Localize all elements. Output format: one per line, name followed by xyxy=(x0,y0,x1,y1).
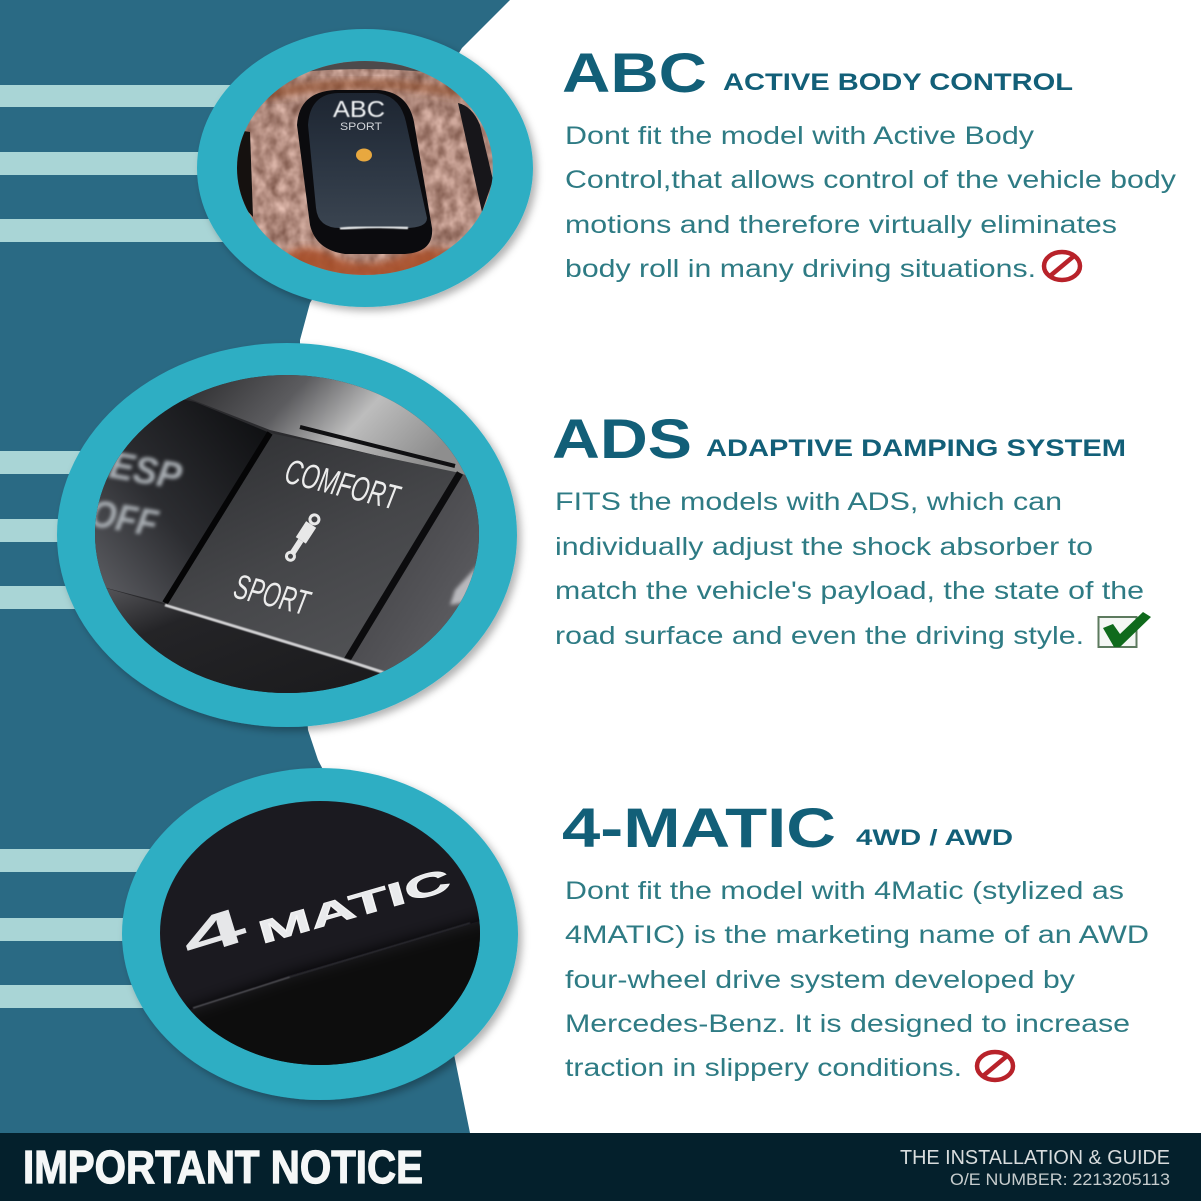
heading: ADS: ADS xyxy=(552,407,692,470)
icon: prohibited xyxy=(1044,252,1080,280)
blurred ESP label: ESP xyxy=(106,445,185,498)
blurred OFF label: OFF xyxy=(86,493,162,546)
stripes: ABC xyxy=(0,85,240,242)
icon: prohibited xyxy=(977,1052,1013,1080)
badge lettering: MATIC xyxy=(254,862,454,951)
footer part number: O/E NUMBER: 2213205113 xyxy=(950,1170,1170,1189)
body text: ABC: Control,that allows control of the vehicle body xyxy=(565,166,1177,194)
subheading: 4WD / AWD: 4WD / AWD xyxy=(856,825,1013,850)
switch label: sport: SPORT xyxy=(230,567,315,624)
orange indicator xyxy=(356,148,372,162)
body text: ADS: road surface and even the driving style. xyxy=(555,622,1084,650)
body text: 4-MATIC: four-wheel drive system developed by xyxy=(565,966,1076,994)
heading: 4-MATIC: 4-MATIC xyxy=(562,796,836,859)
badge numeral: 4 xyxy=(175,896,253,969)
subheading: active body control: ACTIVE BODY CONTROL xyxy=(723,69,1073,96)
switch label: comfort: COMFORT xyxy=(281,452,405,518)
subheading: adaptive damping system: ADAPTIVE DAMPING SYSTEM xyxy=(706,435,1126,462)
footer title: IMPORTANT NOTICE xyxy=(23,1141,423,1193)
body text: 4-MATIC: Dont fit the model with 4Matic (stylized as xyxy=(565,877,1124,905)
circular photo: 4MATIC badge xyxy=(122,768,518,1100)
body text: ABC: body roll in many driving situations. xyxy=(565,255,1036,283)
footer bar xyxy=(0,1133,1201,1201)
teal background shape xyxy=(0,0,510,1133)
button label: ABC xyxy=(333,96,385,122)
section: ADS xyxy=(552,407,1151,650)
stripes: ADS xyxy=(0,451,90,609)
body text: 4-MATIC: Mercedes-Benz. It is designed to increase xyxy=(565,1010,1130,1038)
circular photo: comfort sport switch xyxy=(57,343,517,727)
body text: ADS: individually adjust the shock absorber to xyxy=(555,533,1093,561)
stripes: 4-MATIC xyxy=(0,849,160,1008)
heading: ABC: ABC xyxy=(562,41,707,104)
icon: green check xyxy=(1098,612,1151,647)
body text: 4-MATIC xyxy=(565,877,1149,1082)
body text: 4-MATIC: 4MATIC) is the marketing name of an AWD xyxy=(565,921,1149,949)
footer guide line: THE INSTALLATION & GUIDE xyxy=(900,1147,1170,1169)
section: ABC xyxy=(562,41,1177,283)
body text: ABC xyxy=(565,122,1177,283)
section: 4-MATIC xyxy=(562,796,1149,1082)
body text: ABC: motions and therefore virtually eliminates xyxy=(565,211,1117,239)
body text: ADS: FITS the models with ADS, which can xyxy=(555,488,1062,516)
button sublabel: SPORT xyxy=(340,121,382,133)
body text: 4-MATIC: traction in slippery conditions. xyxy=(565,1054,962,1082)
body text: ADS: match the vehicle's payload, the state of the xyxy=(555,577,1144,605)
body text: ADS xyxy=(555,488,1144,650)
circular photo: ABC sport button xyxy=(197,29,533,307)
shock absorber glyph xyxy=(283,512,322,563)
body text: ABC: Dont fit the model with Active Body xyxy=(565,122,1035,150)
